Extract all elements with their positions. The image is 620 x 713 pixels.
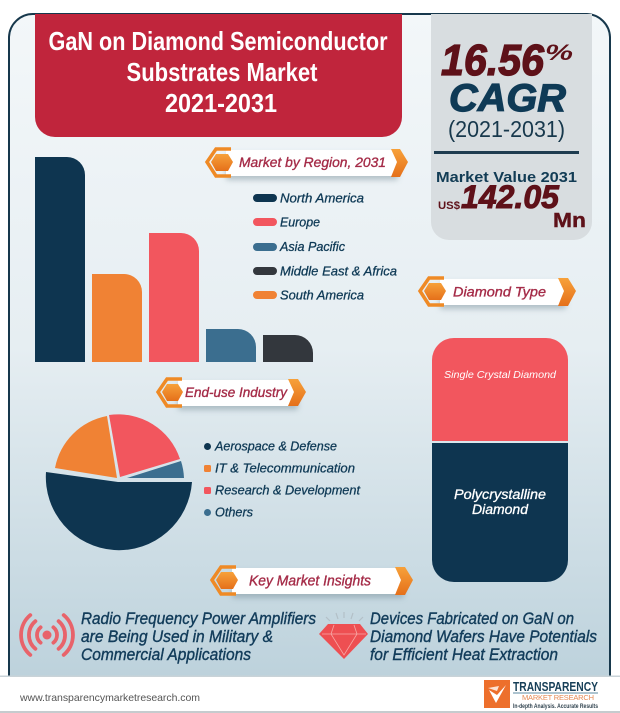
legend: region xyxy=(253,190,397,302)
logo xyxy=(484,679,599,710)
legend: region: Europe xyxy=(280,214,320,230)
insight text: heat extraction: Devices Fabricated on GaN on xyxy=(370,609,574,628)
insight text: heat extraction: Diamond Wafers Have Potentials xyxy=(370,627,597,646)
logo icon xyxy=(484,680,510,708)
label: polycrystalline: Polycrystalline xyxy=(454,487,546,502)
heading: market by region xyxy=(207,149,408,177)
market value label: Market Value 2031 xyxy=(436,169,577,186)
heading: end-use industry xyxy=(158,379,306,406)
legend: region: Asia Pacific xyxy=(279,239,345,254)
footer website: www.transparencymarketresearch.com xyxy=(19,692,200,704)
label: diamond: Diamond xyxy=(472,502,529,517)
chart: diamond type stacked bar xyxy=(432,338,568,582)
insight text: radio frequency: Radio Frequency Power Amplifiers xyxy=(81,609,316,628)
unit: Mn xyxy=(553,210,586,232)
logo subtitle: MARKET RESEARCH xyxy=(522,693,594,702)
title xyxy=(35,14,402,137)
legend: end-use: IT & Telecommunication xyxy=(215,460,355,476)
footer background xyxy=(0,676,620,713)
CAGR label: CAGR xyxy=(449,77,566,120)
title: GaN on Diamond Semiconductor xyxy=(48,26,388,56)
legend: end-use xyxy=(204,438,361,520)
insight text: heat extraction xyxy=(370,609,597,664)
title: Substrates Market xyxy=(126,57,318,87)
insight text: radio frequency: are Being Used in Military & xyxy=(81,627,273,646)
pie chart: end-use industry xyxy=(46,414,192,550)
title: 2021-2031 xyxy=(165,88,277,118)
bar chart: market by region xyxy=(35,157,313,362)
icon: radio signal xyxy=(21,615,73,655)
percent sign: % xyxy=(545,40,573,65)
heading: key market insights: Key Market Insights xyxy=(249,574,371,590)
legend: region: Middle East & Africa xyxy=(280,264,397,278)
insight text: heat extraction: for Efficient Heat Extraction xyxy=(370,645,558,664)
label: single crystal: Single Crystal Diamond xyxy=(444,369,557,381)
logo name: TRANSPARENCY xyxy=(513,679,598,694)
heading: diamond type xyxy=(420,278,576,306)
insight text: radio frequency: Commercial Applications xyxy=(81,645,251,664)
legend: end-use: Aerospace & Defense xyxy=(214,438,337,454)
heading: diamond type: Diamond Type xyxy=(453,284,546,300)
currency: US$ xyxy=(438,200,460,212)
panel: CAGR and market value xyxy=(431,14,592,240)
CAGR period: (2021-2031) xyxy=(448,116,565,142)
insight text: radio frequency xyxy=(81,609,316,664)
logo tagline: In-depth Analysis. Accurate Results xyxy=(513,704,599,710)
legend: region: North America xyxy=(280,190,364,206)
heading: market by region: Market by Region, 2031 xyxy=(239,154,386,170)
legend: end-use: Research & Development xyxy=(215,482,361,498)
icon: diamond xyxy=(319,612,368,659)
heading: key market insights xyxy=(212,567,413,595)
market value: 142.05 xyxy=(461,179,560,215)
CAGR value: 16.56 xyxy=(441,36,544,85)
legend: region: South America xyxy=(280,288,364,302)
heading: end-use industry: End-use Industry xyxy=(185,384,288,400)
legend: end-use: Others xyxy=(215,504,253,520)
